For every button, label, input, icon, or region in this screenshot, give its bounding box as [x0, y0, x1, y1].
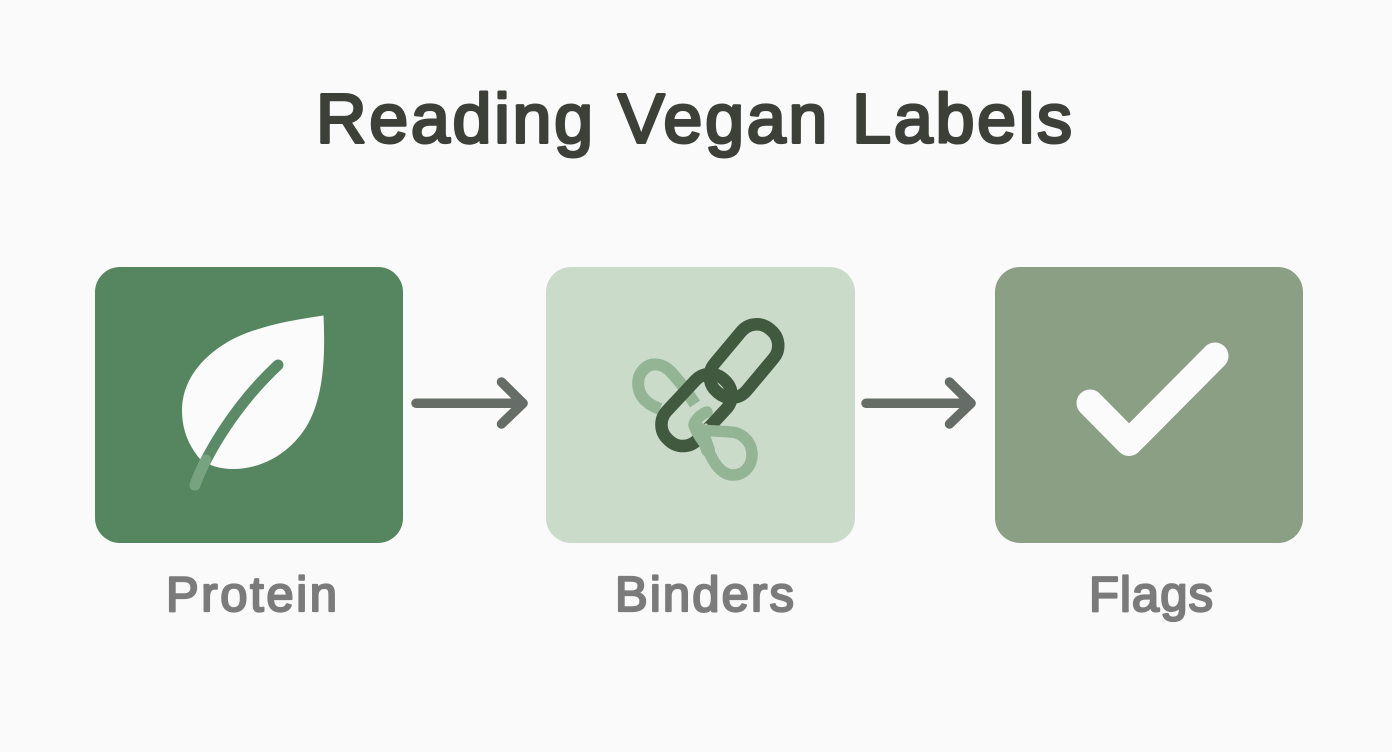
panel: protein: [95, 267, 403, 622]
arrow: protein to binders: [416, 382, 523, 424]
panel: binders: [546, 267, 855, 622]
title: Reading Vegan Labels: [316, 80, 1072, 158]
label: protein: Protein: [166, 568, 337, 622]
arrow: binders to flags: [866, 382, 971, 424]
panel: flags: [995, 267, 1303, 622]
icon: leaf: [182, 316, 324, 485]
icon: chain links: [638, 316, 786, 475]
icon: check mark: [1090, 356, 1215, 442]
label: binders: Binders: [615, 568, 794, 622]
label: flags: Flags: [1089, 568, 1213, 622]
